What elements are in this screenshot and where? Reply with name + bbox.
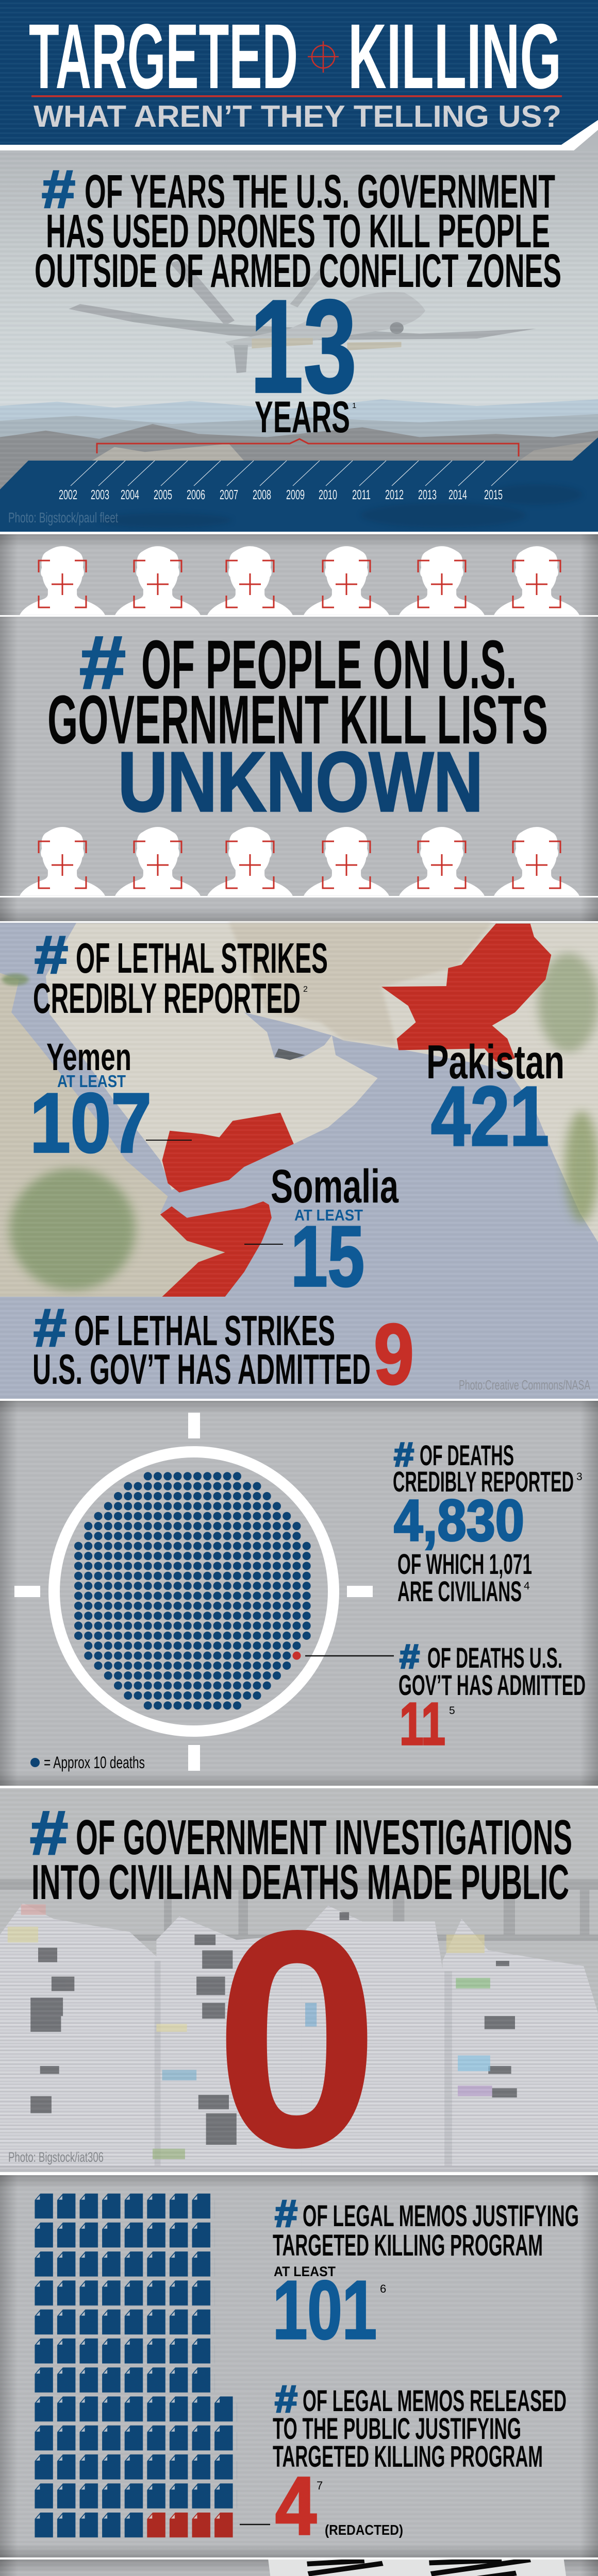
panel: CIA records — [0, 2560, 598, 2576]
stat: Somalia: Somalia — [271, 1160, 399, 1213]
panel: government investigations — [0, 1788, 598, 2212]
heading: strikes reported: 2 — [303, 985, 308, 994]
photo: paper stacks — [0, 1879, 598, 2172]
heading: strikes admitted: U.S. GOV’T HAS ADMITTED — [32, 1345, 371, 1393]
timeline: years: 2006 — [187, 487, 205, 502]
label: years: 1 — [352, 401, 356, 410]
stat: deaths admitted: 5 — [449, 1705, 455, 1717]
stat: deaths reported: 4 — [524, 1580, 530, 1592]
number: 0: 0 — [214, 1867, 379, 2212]
stat: Yemen: AT LEAST — [57, 1072, 126, 1091]
stat: deaths reported — [393, 1435, 583, 1607]
label: years — [255, 393, 356, 442]
heading: years — [35, 160, 561, 297]
stat: legal memos: 6 — [380, 2282, 386, 2295]
stat: memos released: (REDACTED) — [325, 2522, 403, 2538]
timeline: years: 2008 — [253, 487, 271, 502]
bracket: 2002 to 2015 — [97, 439, 519, 456]
value: unknown: UNKNOWN — [118, 735, 483, 829]
stat: Somalia — [244, 1160, 399, 1304]
legend — [30, 1753, 145, 1772]
stat: deaths reported: OF DEATHS — [420, 1439, 514, 1471]
heading: investigations: # — [30, 1798, 68, 1868]
heading: strikes reported: # — [35, 925, 68, 985]
stat: Pakistan — [426, 1035, 564, 1163]
stat: memos released: # — [275, 2378, 297, 2420]
red dot and leader — [293, 1652, 394, 1660]
label: years: YEARS — [255, 393, 350, 442]
timeline: years: 2014 — [448, 487, 467, 502]
timeline: years: 2009 — [286, 487, 305, 502]
stat: memos released: 7 — [317, 2479, 323, 2492]
stat: Pakistan: 421 — [431, 1069, 549, 1163]
timeline: years: 2005 — [154, 487, 172, 502]
stat: deaths admitted: 11 — [400, 1690, 445, 1757]
number: 13: 13 — [250, 273, 357, 420]
subtitle: WHAT AREN’T THEY TELLING US? — [34, 99, 561, 133]
stat: Yemen: Yemen — [46, 1036, 131, 1078]
stat: Somalia: 15 — [291, 1209, 364, 1304]
title: Targeted: TARGETED — [29, 5, 298, 108]
timeline: years: 2015 — [484, 487, 503, 502]
stat: Yemen: 107 — [30, 1076, 152, 1170]
timeline: years: 2003 — [91, 487, 109, 502]
icon: red crosshair — [308, 41, 339, 73]
stat: deaths reported: 4,830 — [394, 1488, 524, 1553]
stat: memos released: 4 — [275, 2460, 317, 2552]
timeline: years: 2011 — [352, 487, 371, 502]
stat: legal memos: # — [275, 2192, 297, 2235]
heading: kill lists: # — [79, 620, 126, 704]
stat: deaths admitted: # — [400, 1637, 420, 1675]
heading: strikes admitted — [32, 1298, 371, 1393]
number: 9: 9 — [374, 1307, 414, 1402]
timeline: years: 2002 — [59, 487, 77, 502]
heading: strikes admitted: # — [34, 1298, 67, 1358]
timeline: years: 2010 — [319, 487, 337, 502]
timeline: years — [59, 461, 518, 502]
panel: lethal strikes map — [0, 923, 598, 1402]
photo credit: Photo: Bigstock/iat306 — [8, 2149, 104, 2165]
timeline: years: 2007 — [220, 487, 238, 502]
stat: legal memos: 101 — [273, 2264, 377, 2357]
row of target silhouettes: top — [0, 546, 598, 617]
drone photo — [69, 260, 536, 373]
dot matrix: approx 10 deaths each — [78, 1476, 307, 1705]
heading: strikes reported: CREDIBLY REPORTED — [33, 974, 301, 1022]
blue timeline band — [0, 437, 598, 532]
stat: memos released — [240, 2378, 567, 2552]
icon: target ring and ticks — [14, 1413, 373, 1771]
heading: investigations — [30, 1798, 572, 1910]
panel: years of drone strikes — [0, 120, 598, 534]
stat: legal memos: AT LEAST — [274, 2264, 336, 2279]
map of Middle East and Horn of Africa — [0, 923, 598, 1297]
mountains — [0, 399, 598, 493]
stat: deaths reported: 3 — [576, 1471, 583, 1483]
red rule under title — [31, 95, 562, 97]
panel: people on kill lists — [0, 534, 598, 921]
panel: title header — [0, 0, 598, 145]
panel: deaths — [0, 1401, 598, 1786]
legend: = Approx 10 deaths — [44, 1753, 145, 1772]
timeline: years: 2012 — [385, 487, 404, 502]
heading: strikes reported: OF LETHAL STRIKES — [76, 934, 328, 982]
heading: kill lists — [47, 620, 548, 758]
stat: Somalia: AT LEAST — [294, 1206, 363, 1224]
photo credit: Photo: Bigstock/paul fleet — [8, 510, 118, 526]
stat: Yemen — [30, 1036, 192, 1170]
stat: deaths admitted — [398, 1637, 586, 1757]
timeline: years: 2013 — [418, 487, 437, 502]
redacted document — [268, 2560, 598, 2576]
heading: strikes reported — [33, 925, 328, 1022]
heading: strikes admitted: OF LETHAL STRIKES — [74, 1307, 335, 1354]
stat: deaths reported: # — [394, 1435, 414, 1473]
panel: legal memos — [0, 2175, 598, 2557]
row of target silhouettes: bottom — [0, 827, 598, 897]
stat: legal memos — [273, 2192, 579, 2357]
pictogram: 101 memos with 4 released — [35, 2194, 237, 2538]
heading: years: # — [42, 160, 75, 219]
timeline: years: 2004 — [121, 487, 139, 502]
